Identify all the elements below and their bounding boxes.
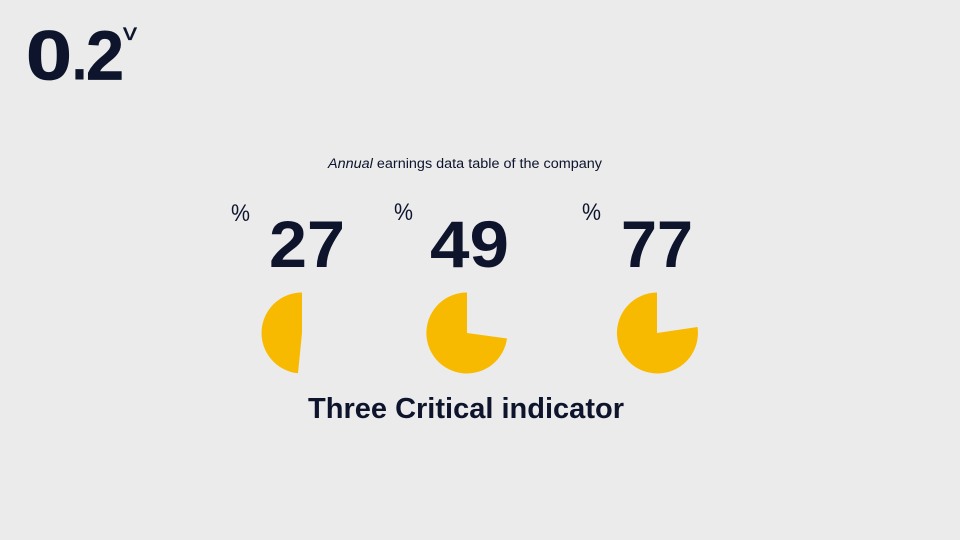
indicator: 27 percent: 27 — [269, 207, 345, 281]
indicator: 77 percent: % — [582, 199, 601, 226]
logo: 0.2v: 2 — [86, 16, 124, 94]
logo: 0.2v: 0 — [26, 16, 72, 94]
indicator: 77 percent: 77 — [621, 207, 693, 281]
subtitle: Annual earnings data table of the company — [327, 156, 602, 171]
logo: 0.2v — [26, 16, 138, 94]
indicator: 27 percent: % — [231, 200, 250, 227]
indicator: 49 percent: % — [394, 199, 413, 226]
indicator: 49 percent — [394, 199, 509, 373]
logo: 0.2v: v — [123, 19, 138, 45]
logo: 0.2v: . — [72, 16, 88, 94]
heading: three critical indicator: Three Critical indicator — [308, 393, 624, 425]
indicator: 27 percent — [231, 200, 345, 373]
indicator: 77 percent — [582, 199, 698, 373]
indicator: 49 percent: 49 — [430, 207, 509, 281]
